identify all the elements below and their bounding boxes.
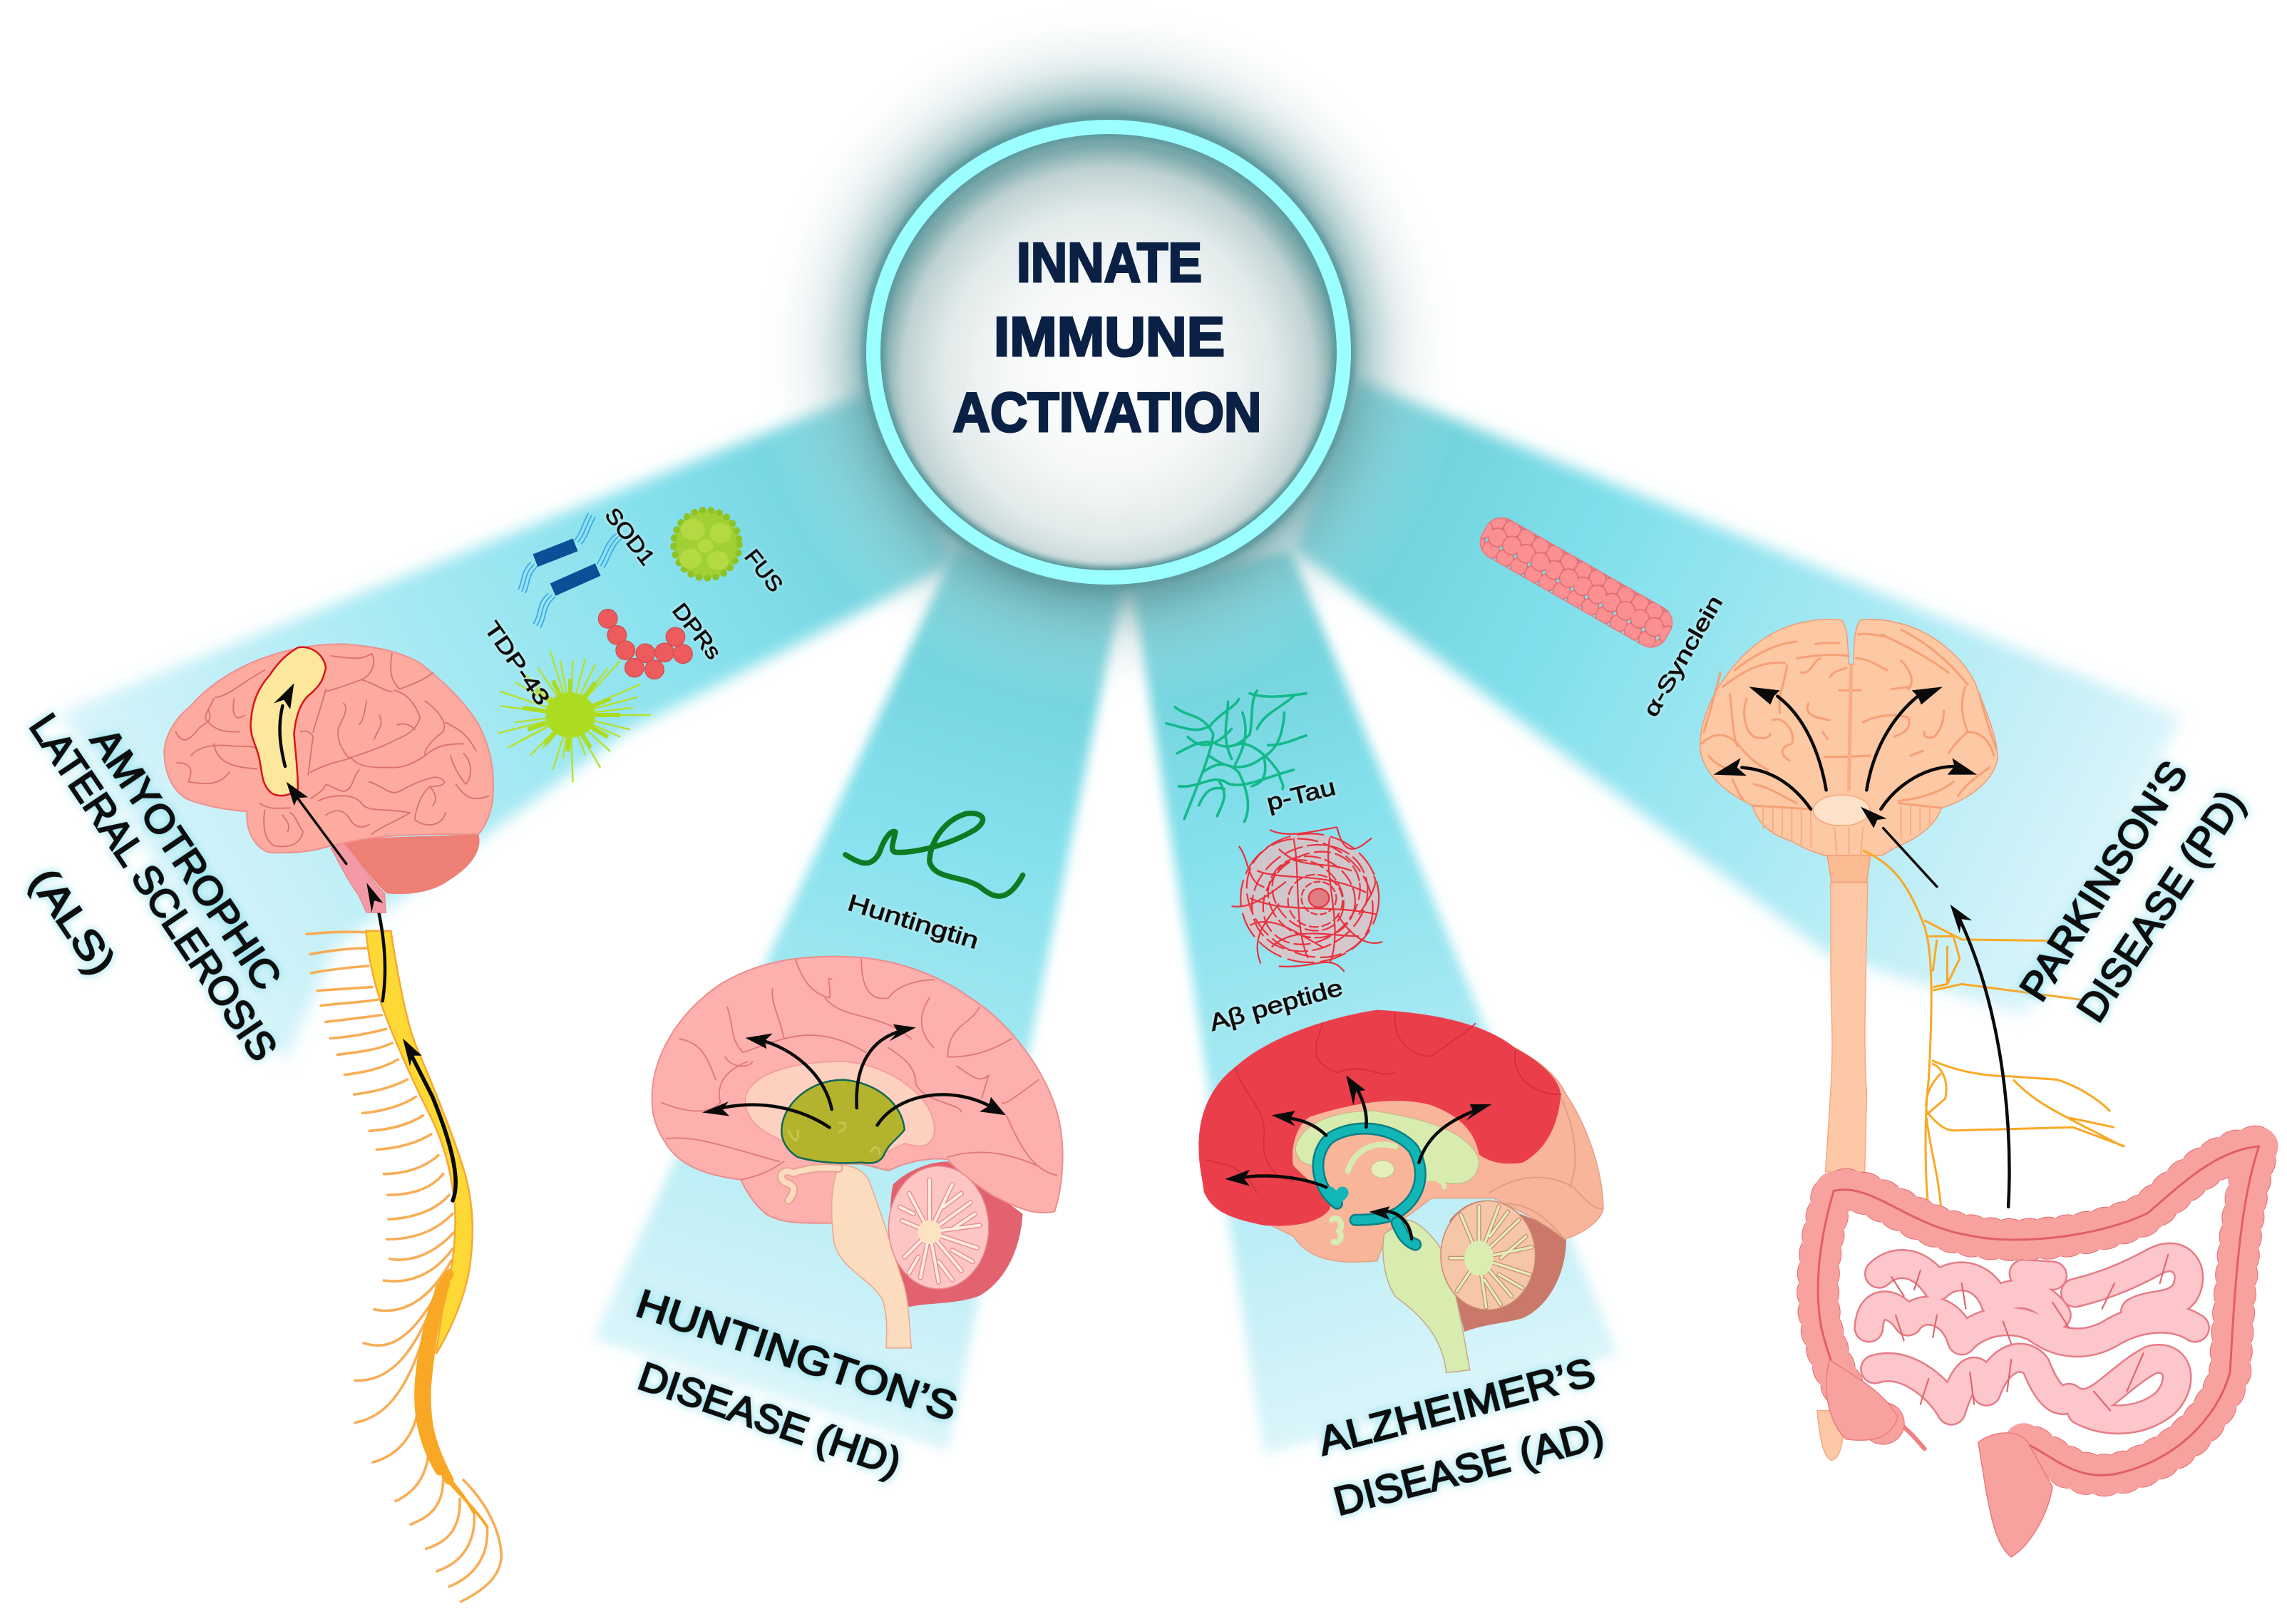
panel: ALS xyxy=(21,503,788,1602)
vagus nerves xyxy=(1863,850,2124,1210)
label: ALS: LATERAL SCLEROSIS xyxy=(21,706,287,1069)
cerebrum xyxy=(652,957,1063,1223)
arrow: motor cortex xyxy=(274,683,294,766)
label: alpha-synuclein: α-Synclein xyxy=(1638,591,1727,721)
motor cortex xyxy=(251,647,326,796)
whole brain base xyxy=(1199,1018,1603,1262)
title: IMMUNE xyxy=(994,305,1225,368)
ring shadow xyxy=(873,127,1344,577)
FUS xyxy=(674,510,739,578)
brain: AD xyxy=(1166,691,1603,1373)
DPRs xyxy=(598,610,692,679)
rectum xyxy=(1978,1433,2052,1557)
title: INNATE xyxy=(1017,231,1202,294)
nerve roots xyxy=(307,932,501,1602)
halo around the ring xyxy=(738,0,1479,709)
beam: PD xyxy=(1294,378,2181,1016)
red cortex xyxy=(1198,1010,1561,1226)
brainstem xyxy=(832,1166,911,1348)
inner thalamus xyxy=(1332,1145,1444,1243)
label: Huntingtin: Huntingtin xyxy=(845,889,982,954)
title xyxy=(952,231,1262,443)
cerebellum outer xyxy=(890,1161,1023,1307)
label: AD: DISEASE (AD) xyxy=(1329,1411,1608,1524)
arrow: brainstem xyxy=(287,782,346,864)
label: ALS: (ALS) xyxy=(21,860,125,982)
label: AD: ALZHEIMER’S xyxy=(1314,1349,1600,1464)
basal ganglia xyxy=(781,1080,905,1163)
labels: AD molecules xyxy=(1206,774,1345,1036)
front view brain xyxy=(1700,620,1998,855)
arrows: brain xyxy=(1713,687,1977,828)
brainstem xyxy=(331,841,386,913)
cecum xyxy=(1826,1360,1898,1440)
A-beta tangle xyxy=(1232,825,1382,972)
corpus callosum xyxy=(745,1062,935,1164)
spinal cord xyxy=(1817,883,1868,1460)
spinal cord and stem xyxy=(1817,822,1875,1460)
red gyri xyxy=(1206,1012,1561,1193)
p-Tau tangle xyxy=(1166,691,1306,822)
beam: ALS xyxy=(60,389,955,1062)
central node: innate immune activation xyxy=(738,0,1479,709)
title: ACTIVATION xyxy=(952,381,1262,443)
gyri xyxy=(662,960,1057,1180)
posterior gyri xyxy=(1490,1094,1603,1239)
cerebrum xyxy=(164,644,493,853)
green corpus callosum xyxy=(1295,1111,1479,1183)
pituitary xyxy=(781,1168,838,1201)
arrow: upper cord head xyxy=(366,883,383,913)
colon xyxy=(1818,1146,2259,1475)
inner disc xyxy=(882,135,1335,569)
SOD1 xyxy=(518,513,624,628)
label: ALS: AMYOTROPHIC xyxy=(83,719,290,997)
beam: HD xyxy=(593,549,1123,1451)
arrow: lower cord xyxy=(403,1039,456,1201)
label: HD xyxy=(631,1280,963,1485)
molecule labels: FUS xyxy=(739,545,788,597)
brain stem xyxy=(1821,822,1875,883)
huntingtin strand xyxy=(846,813,1023,896)
cerebellum outer xyxy=(1449,1201,1566,1332)
brain with motor cortex and cerebellum xyxy=(164,644,493,913)
cerebellum stripes xyxy=(1763,806,1930,855)
hippocampus and fornix xyxy=(1318,1129,1420,1245)
alpha-synuclein filament xyxy=(1474,511,1678,654)
cerebellum inner xyxy=(888,1166,989,1289)
appendix xyxy=(1896,1420,1925,1449)
label: AD xyxy=(1314,1349,1608,1524)
protein icons: ALS xyxy=(498,510,739,782)
cerebellum inner xyxy=(1441,1201,1536,1310)
label: PD: PARKINSON’S xyxy=(2010,753,2196,1009)
label: HD: HUNTINGTON’S xyxy=(631,1280,963,1429)
midbrain xyxy=(1813,795,1870,826)
hemispheres xyxy=(1700,620,1998,855)
label: PD xyxy=(2010,753,2253,1029)
cauda equina xyxy=(419,1275,487,1527)
arrows: HD xyxy=(702,1024,1006,1128)
labels: AD molecules: Aβ peptide xyxy=(1206,974,1345,1036)
TDP-43 xyxy=(498,652,650,782)
arrows: gut to brain xyxy=(1883,828,2009,1207)
molecule labels: TDP-43 xyxy=(480,617,555,710)
arrow: upper cord xyxy=(376,903,385,1001)
midline xyxy=(1849,665,1851,791)
beam: AD xyxy=(1134,549,1618,1454)
bright ring xyxy=(873,127,1344,577)
spinal cord and nerves xyxy=(307,903,501,1602)
molecule labels: DPRs xyxy=(667,598,726,664)
label: HD: DISEASE (HD) xyxy=(633,1353,907,1485)
sulci xyxy=(1702,629,1996,809)
labels: AD molecules: p-Tau xyxy=(1264,774,1338,816)
panel: AD xyxy=(1166,691,1608,1524)
molecule labels xyxy=(480,503,788,710)
label: PD: DISEASE (PD) xyxy=(2068,782,2253,1029)
cerebellum xyxy=(341,834,480,894)
cord xyxy=(366,931,473,1354)
small intestine xyxy=(1869,1255,2195,1419)
panel: HD xyxy=(631,813,1063,1485)
arrows: AD xyxy=(1225,1075,1491,1239)
brain: HD xyxy=(652,813,1063,1348)
brainstem xyxy=(1383,1220,1470,1373)
molecule labels: SOD1 xyxy=(600,503,660,570)
gut anatomy xyxy=(1818,828,2259,1557)
gyri xyxy=(175,654,489,846)
panel: PD xyxy=(1474,511,2259,1557)
